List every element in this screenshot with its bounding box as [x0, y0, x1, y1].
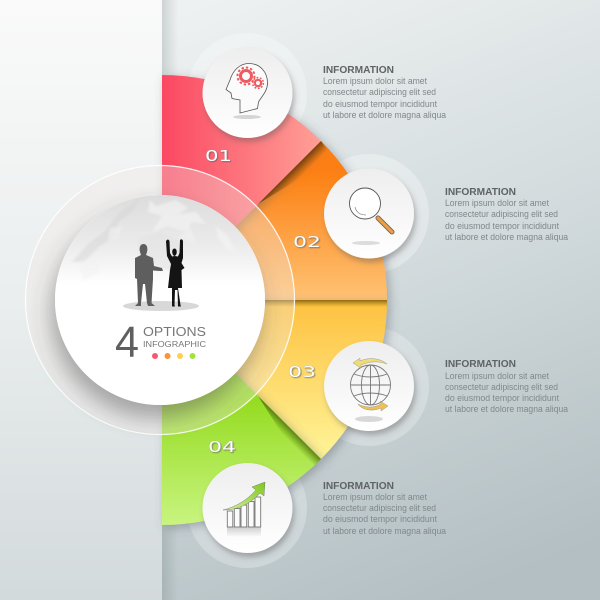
icon halo 3	[309, 326, 429, 446]
text block 2: do eiusmod tempor incididunt	[445, 221, 559, 232]
text block 2: ut labore et dolore magna aliqua	[445, 232, 569, 243]
icon: magnifier	[350, 188, 392, 245]
businessman	[135, 244, 163, 306]
text block 2: Lorem ipsum dolor sit amet	[445, 198, 549, 209]
text block 1: ut labore et dolore magna aliqua	[323, 110, 447, 121]
icon halo 2	[309, 154, 429, 274]
text block 2: consectetur adipiscing elit sed	[445, 209, 558, 220]
icon halo 1	[187, 33, 307, 153]
infographic: INFOGRAPHIC	[143, 339, 206, 349]
text block 4: Lorem ipsum dolor sit amet	[323, 492, 427, 503]
icon: head with gears	[226, 64, 268, 119]
text block 3: Lorem ipsum dolor sit amet	[445, 371, 549, 382]
number 03: 03	[288, 363, 316, 381]
colour dots	[152, 353, 196, 359]
icon disc 4	[202, 463, 292, 553]
text block 1: consectetur adipiscing elit sed	[323, 87, 436, 98]
segment 01 red	[162, 75, 321, 300]
text block 1: INFORMATION	[323, 64, 394, 76]
people shadow	[123, 301, 199, 311]
text block 1: do eiusmod tempor incididunt	[323, 99, 437, 110]
text block 3	[445, 358, 569, 415]
text block 1: Lorem ipsum dolor sit amet	[323, 76, 427, 87]
text block 2	[445, 186, 569, 243]
text block 2: INFORMATION	[445, 186, 516, 198]
text block 3: consectetur adipiscing elit sed	[445, 382, 558, 393]
central circle	[55, 195, 265, 405]
number 01: 01	[205, 147, 232, 165]
icon disc 2	[324, 168, 414, 258]
text block 3: INFORMATION	[445, 358, 516, 370]
icon: growth chart	[223, 482, 265, 537]
fan chart	[162, 75, 387, 525]
left panel	[0, 0, 178, 600]
options: OPTIONS	[143, 324, 206, 339]
icon: globe with arrows	[350, 358, 390, 422]
segment 03 yellow	[162, 300, 387, 459]
text block 4: do eiusmod tempor incididunt	[323, 514, 437, 525]
icon disc 3	[324, 341, 414, 431]
text block 4: consectetur adipiscing elit sed	[323, 503, 436, 514]
text block 3: do eiusmod tempor incididunt	[445, 393, 559, 404]
text block 1	[323, 64, 447, 121]
text block 4: INFORMATION	[323, 480, 394, 492]
icon halo 4	[187, 448, 307, 568]
segment 02 orange	[162, 141, 387, 300]
number 02: 02	[293, 233, 321, 251]
segment shadows	[230, 141, 387, 473]
glass ring	[26, 166, 294, 434]
segment 04 green	[162, 300, 321, 525]
number 04: 04	[208, 438, 236, 456]
big 4: 4	[115, 318, 139, 367]
businesswoman	[166, 239, 184, 306]
icon disc 1	[202, 48, 292, 138]
text block 4: ut labore et dolore magna aliqua	[323, 526, 447, 537]
text block 4	[323, 480, 447, 537]
text block 3: ut labore et dolore magna aliqua	[445, 404, 569, 415]
world map	[55, 195, 265, 405]
